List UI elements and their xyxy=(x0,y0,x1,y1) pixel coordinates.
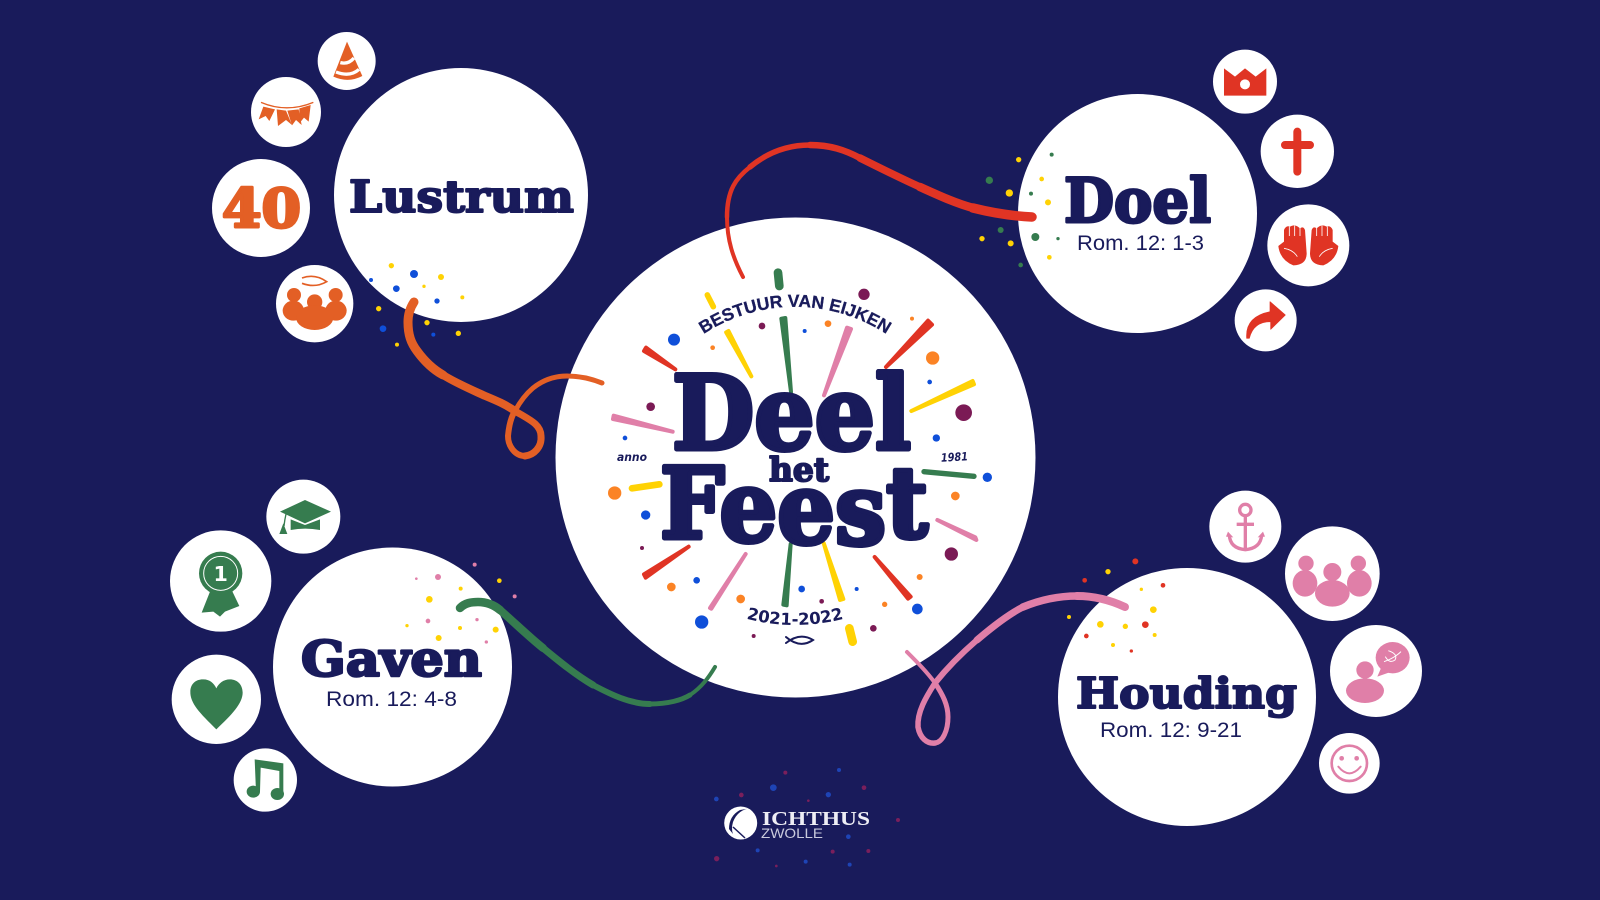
icon: bunting xyxy=(251,77,321,147)
icon: music notes xyxy=(234,748,297,812)
icon: smiley xyxy=(1319,733,1380,794)
icon: person talking with fish bubble xyxy=(1330,625,1422,717)
logo wordmark: ZWOLLE: ZWOLLE xyxy=(761,825,823,841)
heading: Houding: Houding xyxy=(1076,669,1297,719)
title: Deel: Deel xyxy=(672,354,911,474)
icon: open hands xyxy=(1267,204,1349,286)
icon: group of people xyxy=(1285,526,1380,621)
panel: Doel xyxy=(1018,50,1349,351)
curved label: 2021-2022: 2021-2022 xyxy=(748,608,842,625)
icon: number 40 xyxy=(212,159,310,257)
heading: Lustrum: Lustrum xyxy=(349,172,574,223)
ribbon: pink to Houding xyxy=(907,596,1125,743)
panel: central badge xyxy=(556,218,1036,698)
title: het: het xyxy=(769,450,830,489)
title: Feest: Feest xyxy=(660,446,928,568)
icon: graduation cap xyxy=(266,480,340,554)
logo confetti xyxy=(714,768,900,867)
logo wordmark: ICHTHUS: ICHTHUS xyxy=(762,808,870,830)
icon: rosette number 1 xyxy=(170,530,271,632)
heading: Doel: Doel xyxy=(1064,166,1211,237)
heading: Gaven: Gaven xyxy=(301,630,482,688)
reference: Rom. 12: 9-21: Rom. 12: 9-21 xyxy=(1100,719,1242,742)
icon: anchor xyxy=(1209,491,1281,563)
ribbon: orange to Lustrum xyxy=(408,302,602,456)
icon: number 40: 40 xyxy=(222,178,301,240)
panel: Gaven xyxy=(170,480,512,812)
icon: fish symbol xyxy=(786,637,813,644)
panel: Lustrum xyxy=(212,32,588,342)
logo: Ichthus Zwolle xyxy=(714,768,900,867)
ribbon: red to Doel xyxy=(727,145,1032,277)
logo mark xyxy=(724,806,757,840)
confetti: Lustrum xyxy=(369,263,464,347)
curved label: 2021-2022 xyxy=(748,608,842,625)
icon: cross xyxy=(1261,115,1334,188)
icon: heart xyxy=(172,655,261,744)
label: 1981: 1981 xyxy=(941,449,968,465)
icon: people with fish xyxy=(276,265,353,342)
icon: rosette number 1: 1 xyxy=(213,562,228,586)
reference: Rom. 12: 1-3: Rom. 12: 1-3 xyxy=(1077,232,1204,255)
icon: share arrow xyxy=(1235,289,1297,351)
confetti: Gaven xyxy=(405,563,517,644)
curved heading: Bestuur van Eijken: BESTUUR VAN EIJKEN xyxy=(698,294,892,334)
label: anno: anno xyxy=(617,450,647,464)
confetti: Houding xyxy=(1067,558,1165,653)
panel: Houding xyxy=(1058,491,1422,826)
icon: crown xyxy=(1213,50,1277,114)
ribbon: green to Gaven xyxy=(460,602,715,704)
icon: party hat xyxy=(318,32,376,90)
firework streaks and dots xyxy=(608,273,992,642)
confetti: Doel xyxy=(979,153,1060,267)
reference: Rom. 12: 4-8: Rom. 12: 4-8 xyxy=(326,688,457,711)
